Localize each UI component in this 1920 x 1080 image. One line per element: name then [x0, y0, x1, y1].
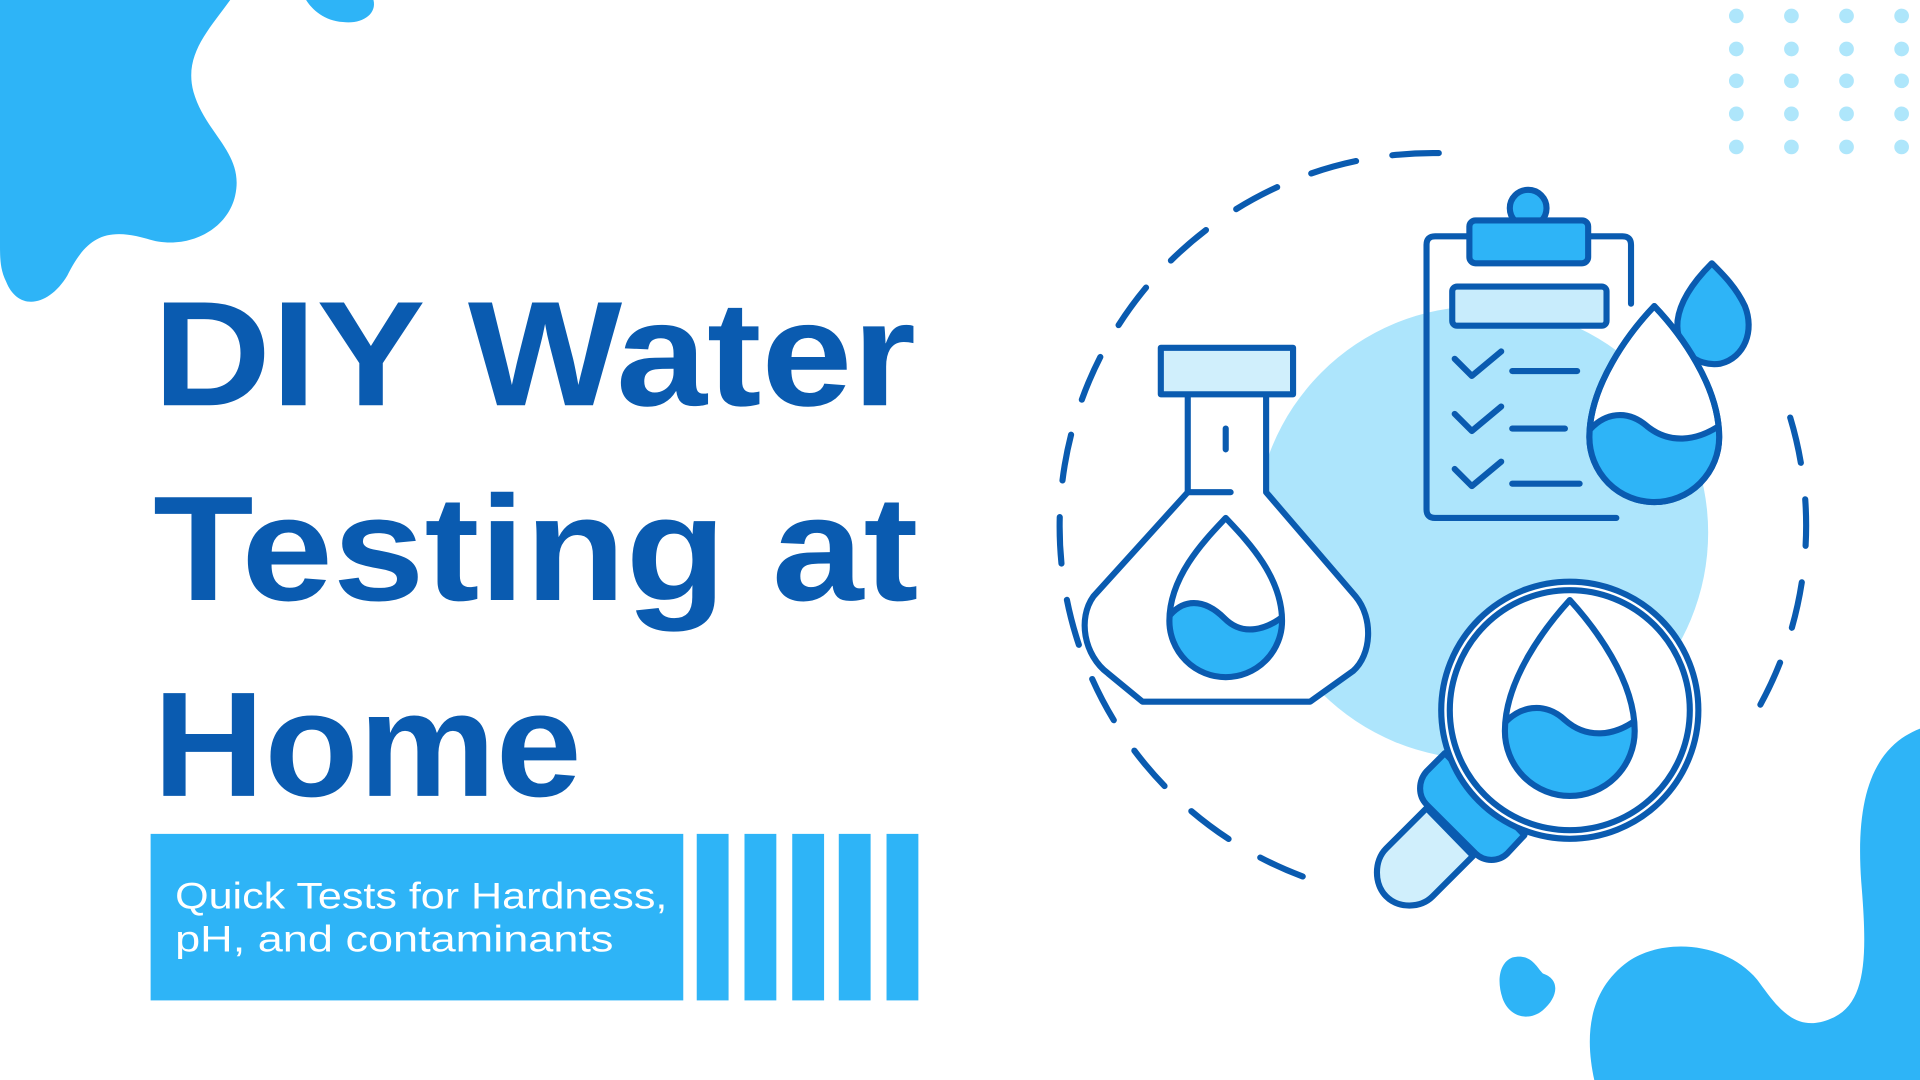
icon: magnifier [1377, 582, 1698, 906]
icon: clipboard [1427, 190, 1631, 518]
subtitle box: Quick Tests for Hardness, [175, 876, 667, 917]
subtitle box: pH, and contaminants [175, 918, 613, 959]
stripes [697, 834, 918, 1000]
dashed circle [1060, 153, 1806, 882]
title: Testing at [153, 465, 918, 632]
dot grid [1729, 9, 1909, 154]
title: DIY Water [153, 270, 916, 437]
blob: small heart [1500, 957, 1555, 1017]
icon: water drops [1580, 263, 1749, 508]
blob: top small [306, 0, 374, 22]
blob: top left [0, 0, 237, 302]
title [153, 270, 918, 828]
title: Home [153, 661, 582, 828]
icon: flask [1085, 348, 1368, 702]
subtitle box [151, 834, 683, 1000]
light circle background [1255, 306, 1708, 759]
blob: bottom right [1590, 729, 1920, 1080]
